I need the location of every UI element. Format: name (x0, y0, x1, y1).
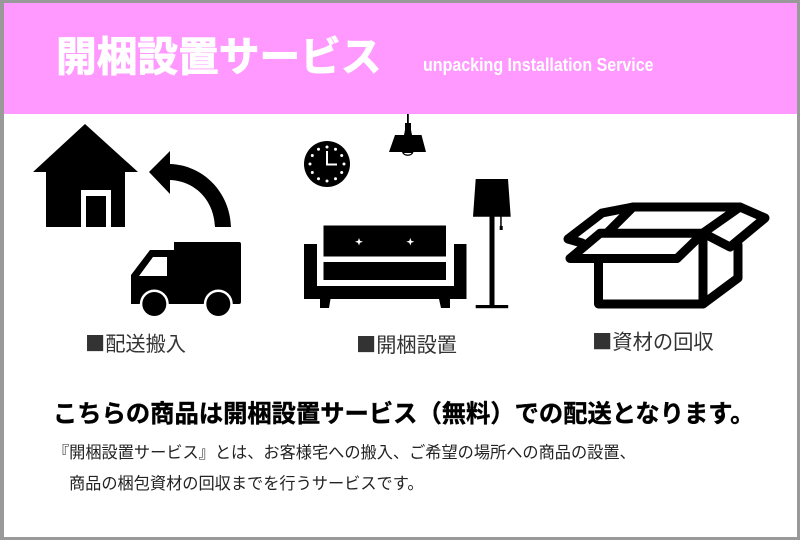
title: 開梱設置サービス (56, 34, 382, 80)
icon: delivery truck (131, 242, 241, 318)
label: installation: ■開梱設置 (356, 329, 457, 358)
description line 2: 商品の梱包資材の回収までを行うサービスです。 (69, 475, 424, 493)
icon: house (33, 124, 138, 227)
label: collection: ■資材の回収 (592, 325, 714, 355)
icon: open cardboard box (568, 207, 765, 304)
icon: curved arrow (149, 151, 231, 227)
label: delivery: ■配送搬入 (85, 328, 186, 357)
icon: floor lamp (473, 179, 511, 308)
icon: wall clock (304, 141, 350, 187)
description line 1: 『開梱設置サービス』とは、お客様宅への搬入、ご希望の場所への商品の設置、 (53, 444, 636, 462)
subtitle: unpacking Installation Service (423, 55, 654, 75)
icon: sofa (304, 226, 466, 308)
icon: pendant lamp (389, 114, 426, 156)
header band (3, 3, 797, 114)
main message: こちらの商品は開梱設置サービス（無料）での配送となります。 (53, 401, 754, 428)
